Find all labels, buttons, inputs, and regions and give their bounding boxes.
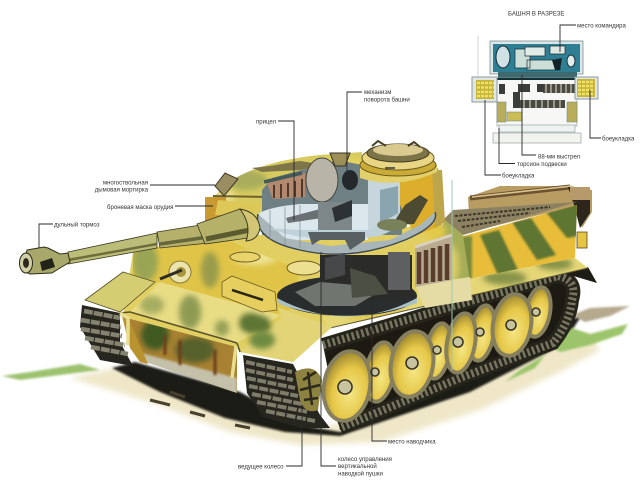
- smoke mortar: [215, 173, 238, 196]
- label: drive sprocket: ведущее колесо: [238, 464, 284, 470]
- ground under the tank: [2, 306, 630, 445]
- label: smoke mortar: дымовая мортирка: [95, 188, 149, 194]
- traverse mechanism: [330, 153, 358, 190]
- turret ring disc and glass section: [258, 195, 436, 254]
- driver visor block: [222, 276, 277, 312]
- dark space behind the road wheels: [323, 276, 574, 430]
- hull front plate: [133, 241, 298, 314]
- right front track and sprocket: [243, 355, 330, 428]
- turret dome with camouflage: [205, 152, 365, 222]
- cut-away turret interior: [262, 153, 402, 235]
- label: traverse mechanism: поворота башни: [364, 97, 410, 103]
- turret hatch disc: [306, 158, 338, 202]
- label: torsion: торсион подвески: [517, 162, 567, 168]
- hatch ovals on hull roof: [230, 252, 321, 275]
- label: gun mantlet: броневая маска орудия: [107, 205, 173, 211]
- lower front plate: [122, 316, 237, 395]
- hull side area beside turret: [415, 220, 470, 300]
- commander cupola: [360, 141, 437, 183]
- road wheels: [318, 285, 554, 424]
- rear track: [323, 276, 573, 428]
- label: elevation wheel: наводкой пушки: [338, 470, 383, 477]
- rear hull top and exhaust covers: [443, 186, 592, 248]
- label: muzzle brake: дульный тормоз: [54, 222, 100, 228]
- hull floor section: [493, 125, 581, 143]
- ammunition in turret: [264, 173, 305, 199]
- label: smoke mortar: многоствольная: [103, 180, 148, 186]
- label: commander seat: место командира: [577, 24, 626, 30]
- base hull body: [123, 225, 470, 362]
- inset title: БАШНЯ В РАЗРЕЗЕ: [508, 12, 564, 18]
- gun breech mechanism: [286, 200, 365, 250]
- label: gunner seat: место наводчика: [388, 440, 436, 446]
- callout line: thin section marker: [451, 180, 453, 370]
- muzzle brake: [20, 247, 70, 274]
- label: ammo left: боеукладка: [502, 174, 535, 180]
- hull rear side plate with camouflage stripes: [460, 204, 578, 280]
- gunner seat area in turret: [377, 195, 428, 231]
- leader lines: [39, 25, 601, 466]
- label: sight: прицел: [256, 120, 277, 126]
- label: elevation wheel: колесо управления: [338, 457, 392, 463]
- label: traverse mechanism: механизм: [364, 90, 391, 96]
- front mudguards and glacis plate: [85, 272, 332, 378]
- inset: turret cross-section: [472, 36, 598, 143]
- lower crew compartment: [277, 252, 472, 316]
- left front track: [80, 305, 133, 366]
- lower section: [497, 78, 577, 126]
- label: ammo right: боеукладка: [602, 136, 635, 142]
- side mudguard strip: [322, 258, 588, 328]
- turret rear cylinder: [400, 168, 445, 236]
- ammunition rack beside lower compartment: [415, 235, 452, 287]
- label: 88 mm round: 88-мм выстрел: [538, 154, 581, 160]
- label: elevation wheel: вертикальной: [338, 463, 377, 470]
- ammunition bins: [472, 77, 598, 122]
- gun barrel: [68, 209, 260, 264]
- upper turret section: [490, 41, 583, 78]
- hull machine gun ball mount: [160, 261, 191, 283]
- dark wedge under rear mudguard: [560, 267, 597, 283]
